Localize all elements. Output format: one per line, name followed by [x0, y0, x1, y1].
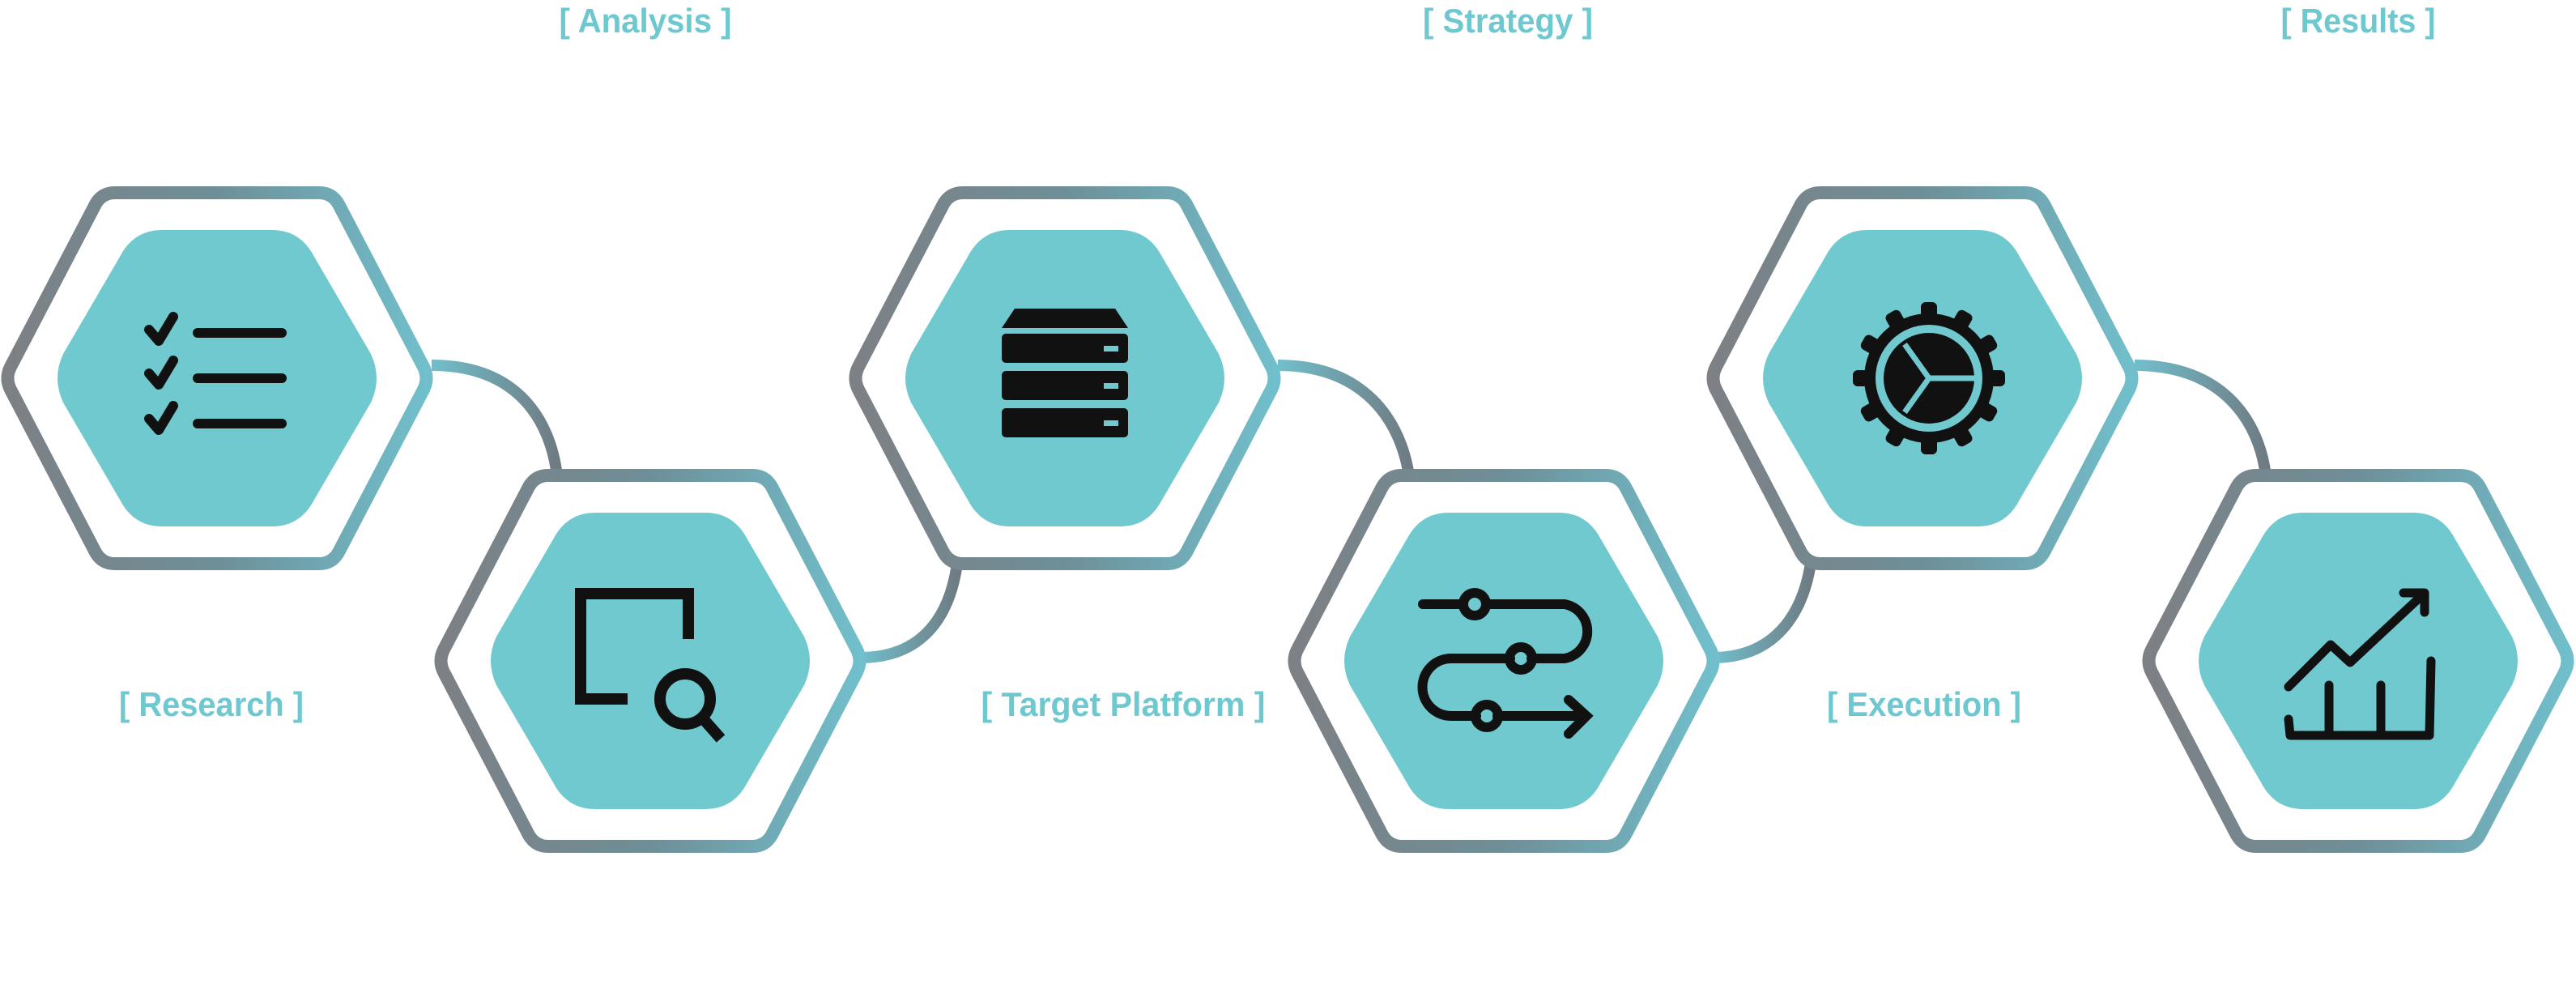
- icon: gear with pie chart: [1853, 302, 2005, 454]
- connector: analysis to target platform: [860, 557, 958, 658]
- label: research: [ Research ]: [119, 685, 304, 723]
- connector: strategy to execution: [1713, 557, 1812, 658]
- hexagon: target platform: [855, 193, 1275, 564]
- icon: checklist: [149, 317, 282, 430]
- hexagon: results: [2149, 475, 2567, 846]
- hexagon: research: [8, 193, 426, 564]
- hexagon: strategy: [1294, 475, 1714, 846]
- connector: research to analysis: [432, 365, 557, 476]
- hexagon: analysis: [441, 475, 860, 846]
- icon: server: [1002, 309, 1128, 437]
- connector: execution to results: [2135, 365, 2266, 476]
- label: results: [ Results ]: [2280, 2, 2436, 40]
- label: strategy: [ Strategy ]: [1423, 2, 1593, 40]
- label: execution: [ Execution ]: [1827, 685, 2021, 723]
- hexagon: execution: [1714, 193, 2131, 564]
- icon: growth chart: [2289, 593, 2431, 735]
- connector: target platform to strategy: [1278, 365, 1409, 476]
- label: target platform: [ Target Platform ]: [981, 685, 1265, 723]
- icon: route: [1423, 593, 1587, 734]
- icon: search document: [581, 594, 721, 739]
- label: analysis: [ Analysis ]: [559, 2, 732, 40]
